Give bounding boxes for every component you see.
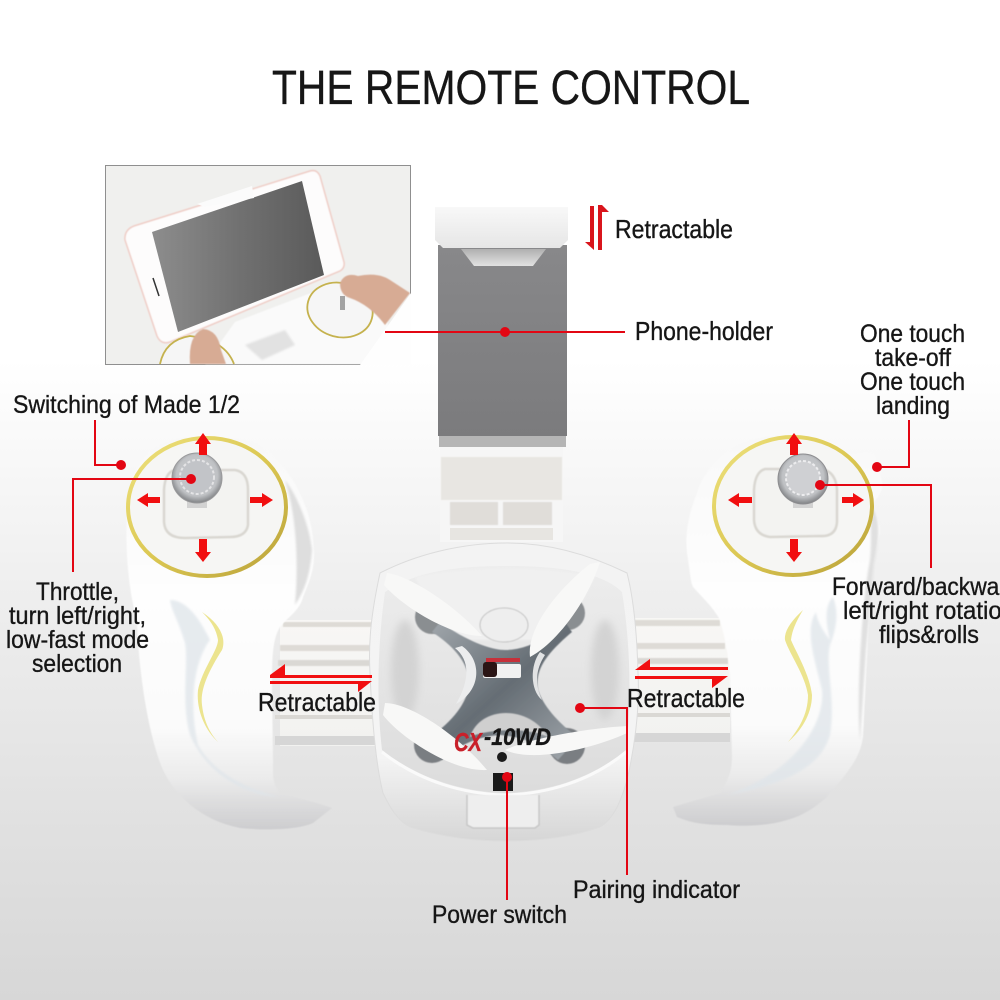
case upper light area (415, 569, 595, 640)
label: one touch take-off and landing (860, 320, 965, 420)
label: retractable right: Retractable (627, 683, 745, 713)
drone dome (480, 608, 528, 642)
label: power switch: Power switch (432, 901, 567, 929)
right knob texture (786, 461, 820, 495)
cut corner (360, 293, 411, 365)
left swoosh blue-grey (170, 600, 280, 797)
left grip (126, 437, 332, 829)
blade bottom-right (505, 726, 627, 755)
left grip body (126, 437, 332, 829)
holder feet (450, 502, 498, 525)
arrows: retractable vertical (585, 205, 609, 250)
right swoosh blue-grey (727, 597, 836, 795)
phone speaker (153, 278, 159, 296)
left stick shaft (187, 495, 207, 508)
left gold ring (128, 438, 286, 576)
label: retractable top: Retractable (615, 214, 733, 244)
motor bottom-left (414, 727, 450, 763)
phone body (125, 171, 344, 343)
label: one touch take-off and landing: One touch (860, 368, 965, 396)
drone sticker dark part (483, 662, 497, 677)
label: one touch take-off and landing: landing (876, 392, 950, 420)
stick in photo (340, 296, 345, 310)
holder beige base (441, 457, 562, 500)
drone body highlight right (533, 652, 545, 700)
holder feet right (503, 502, 552, 525)
case outer shell (369, 543, 638, 841)
callout lines (73, 332, 931, 900)
drone belly plate (470, 713, 548, 737)
label: throttle: turn left/right, (9, 602, 146, 630)
controller details in photo (245, 330, 295, 360)
power switch body (493, 773, 513, 791)
holder lower bar (450, 528, 553, 540)
logo CX: CX (454, 727, 483, 757)
rails left (275, 620, 380, 746)
title: THE REMOTE CONTROL (272, 62, 750, 115)
right ring face (714, 437, 872, 575)
callout dots (116, 327, 882, 782)
inset photo: phone mounted on controller (106, 166, 411, 365)
motor top-left (415, 600, 449, 634)
drone sticker red band (486, 658, 520, 662)
right grip side shade (859, 505, 878, 740)
label: switching of mode: Switching of Made 1/2 (13, 391, 240, 419)
phone holder (435, 207, 568, 542)
logo 10WD: -10WD (484, 724, 551, 751)
photo gold ring left (160, 336, 234, 364)
left thumb (190, 329, 226, 364)
right stick socket (754, 469, 837, 537)
right gold ring (714, 437, 872, 575)
label: throttle: low-fast mode (6, 626, 149, 654)
label: retractable left: Retractable (258, 687, 376, 717)
holder grey panel (438, 245, 567, 436)
holder lower arm (440, 447, 563, 542)
left ring face (128, 438, 286, 576)
transparent case with drone (369, 543, 638, 841)
case lip highlight (382, 752, 626, 795)
motor top-right (551, 596, 585, 630)
right knob (778, 454, 828, 504)
left grip side shade (285, 480, 312, 605)
left stick socket (164, 470, 248, 538)
label: forward/backward (832, 573, 1000, 649)
right stick shaft (793, 495, 813, 508)
case inner tray (378, 566, 629, 793)
label: forward/backward: flips&rolls (879, 621, 979, 649)
holder top cap (435, 207, 568, 248)
label: throttle (6, 578, 149, 678)
label: pairing indicator: Pairing indicator (573, 876, 740, 904)
case clasp (467, 795, 539, 828)
blade top-left (384, 573, 482, 636)
phone clip (197, 186, 254, 207)
left swoosh yellow (198, 612, 223, 742)
controller shape in photo (205, 280, 388, 364)
phone screen (152, 181, 324, 332)
right grip (673, 435, 882, 826)
drone sticker (483, 664, 521, 678)
drone body highlight left (455, 646, 476, 704)
label: one touch take-off and landing: take-off (875, 344, 951, 372)
holder strip (439, 436, 566, 447)
right swoosh yellow (785, 610, 812, 742)
right grip body (673, 435, 882, 826)
label: throttle: Throttle, (36, 578, 119, 606)
left knob texture (180, 460, 214, 494)
label: phone-holder: Phone-holder (635, 316, 773, 346)
label: throttle: selection (32, 650, 122, 678)
arrows: right joystick (728, 433, 864, 562)
tray side shade right (591, 620, 619, 720)
case hole (497, 752, 507, 762)
right thumb (340, 275, 410, 325)
left knob (172, 453, 222, 503)
arrows: retractable right (635, 659, 728, 688)
blade top-right (530, 562, 600, 657)
arrows: left joystick (137, 433, 273, 562)
motor bottom-right (549, 728, 585, 764)
holder notch (461, 249, 546, 266)
arrows: retractable left (270, 664, 372, 692)
tray side shade (391, 620, 419, 720)
rails right (625, 618, 730, 742)
photo gold ring right (301, 275, 379, 345)
label: one touch take-off and landing: One touch (860, 320, 965, 348)
drone body (425, 622, 578, 760)
blade bottom-left (383, 703, 487, 770)
